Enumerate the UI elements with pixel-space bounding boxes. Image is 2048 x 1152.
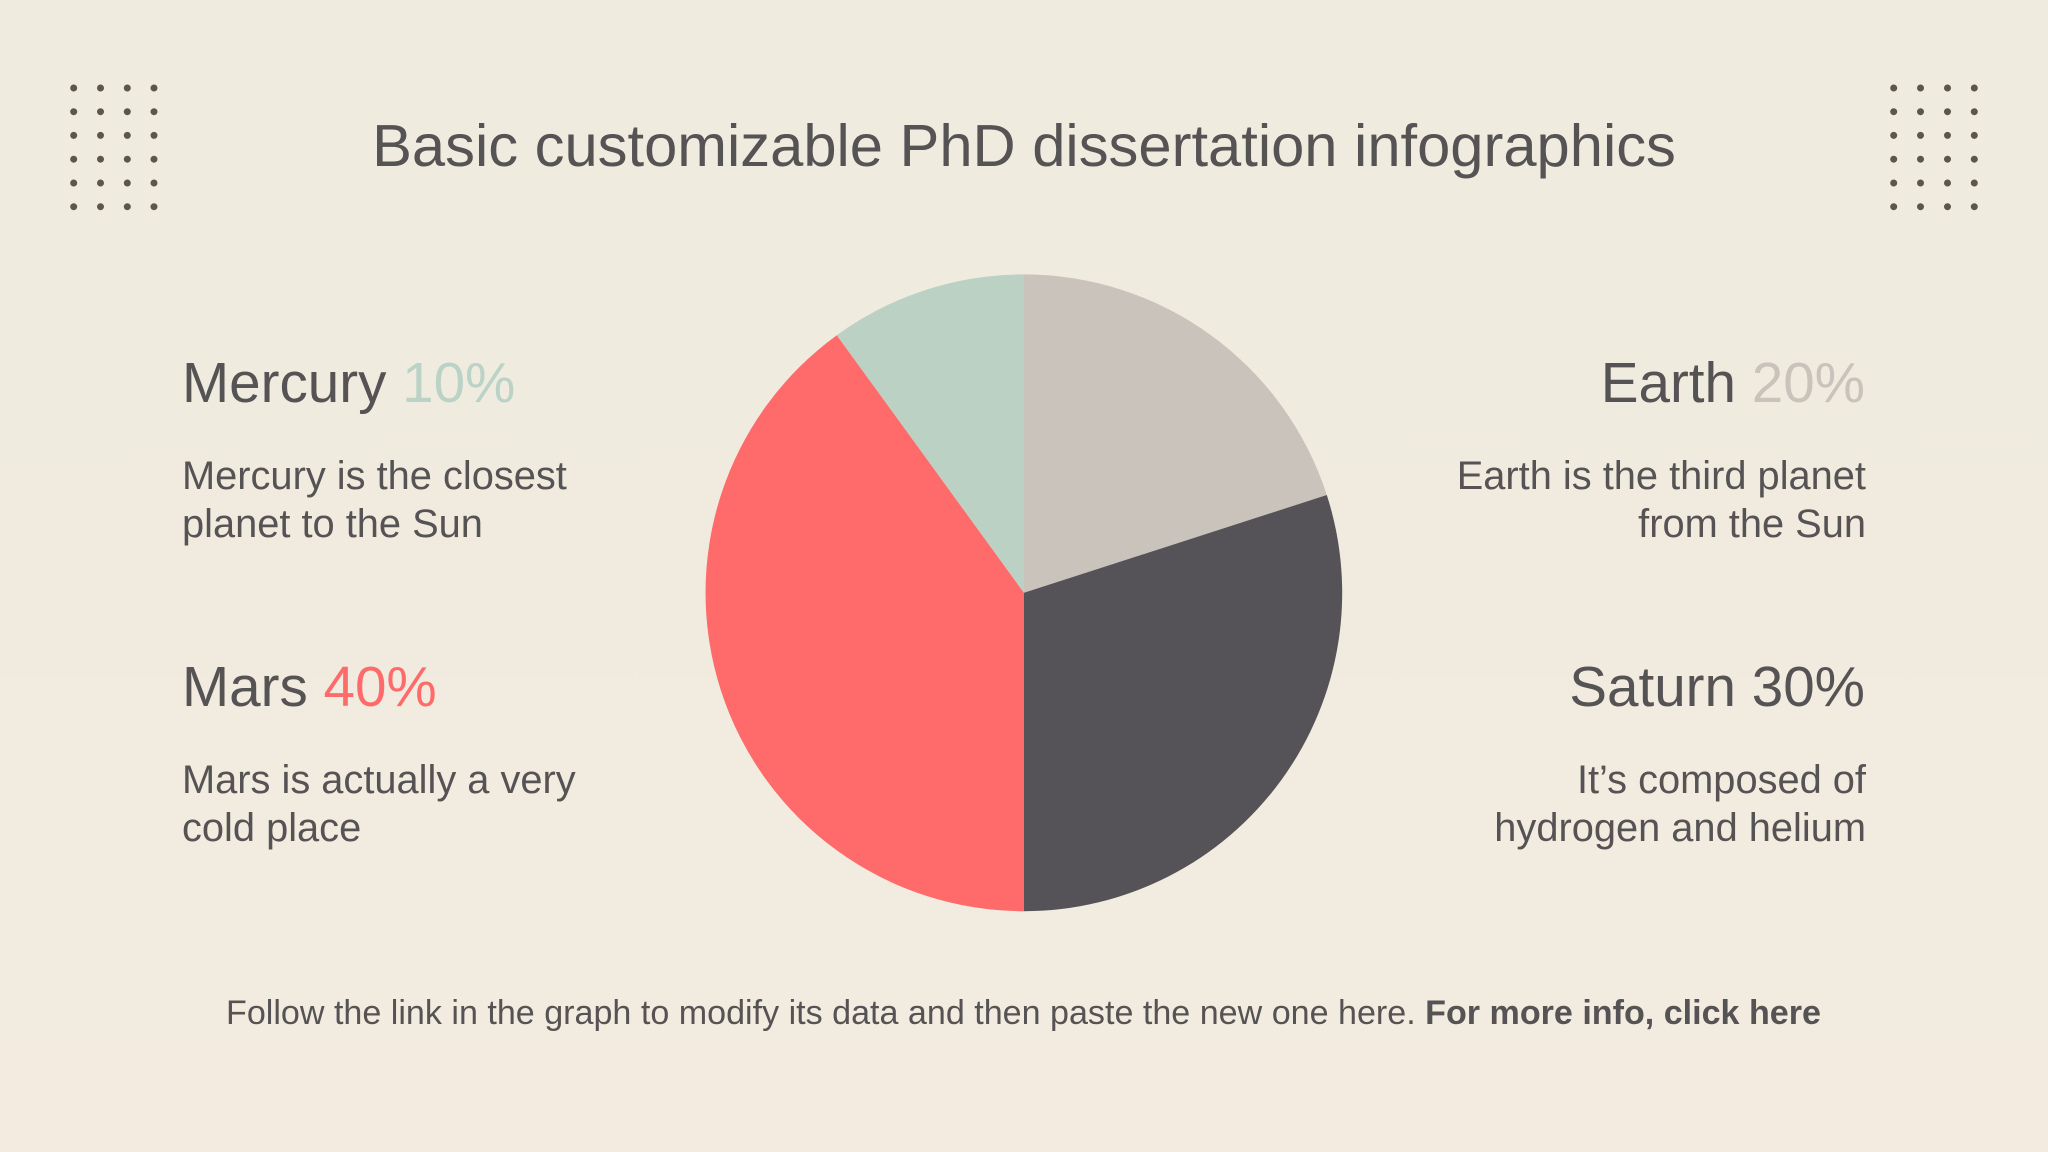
panel: Mercury bbox=[182, 351, 567, 546]
panel: Saturn bbox=[1494, 655, 1867, 850]
decorative dot grid: top left bbox=[70, 84, 158, 210]
heading: Mercury 10%: Mercury 10% bbox=[182, 351, 515, 414]
pie slice: Mars 40% bbox=[706, 335, 1024, 911]
heading: Earth 20%: Earth 20% bbox=[1601, 351, 1865, 414]
footer note: Follow the link in the graph to modify its data and then paste the new one here. For more info, click here bbox=[226, 994, 1821, 1032]
decorative dot grid: top right bbox=[1890, 84, 1978, 210]
heading: Saturn 30%: Saturn 30% bbox=[1569, 655, 1865, 718]
text: Saturn description: hydrogen and helium bbox=[1494, 806, 1866, 850]
heading: Mars 40%: Mars 40% bbox=[182, 655, 437, 718]
pie slice: Earth 20% bbox=[1024, 274, 1327, 593]
pie slice: Saturn 30% bbox=[1024, 495, 1342, 911]
text: Mars description: cold place bbox=[182, 806, 361, 850]
text: Mars description: Mars is actually a very bbox=[182, 758, 576, 802]
panel: Mars bbox=[182, 655, 576, 850]
panel: Earth bbox=[1457, 351, 1866, 546]
text: Mercury description: planet to the Sun bbox=[182, 502, 483, 546]
pie slice: Mercury 10% bbox=[837, 274, 1024, 593]
pie chart bbox=[706, 274, 1342, 911]
text: Saturn description: It’s composed of bbox=[1577, 758, 1866, 802]
text: Mercury description: Mercury is the closest bbox=[182, 454, 567, 498]
text: Earth description: Earth is the third planet bbox=[1457, 454, 1866, 498]
title: Basic customizable PhD dissertation infographics bbox=[372, 112, 1676, 179]
text: Earth description: from the Sun bbox=[1638, 502, 1866, 546]
